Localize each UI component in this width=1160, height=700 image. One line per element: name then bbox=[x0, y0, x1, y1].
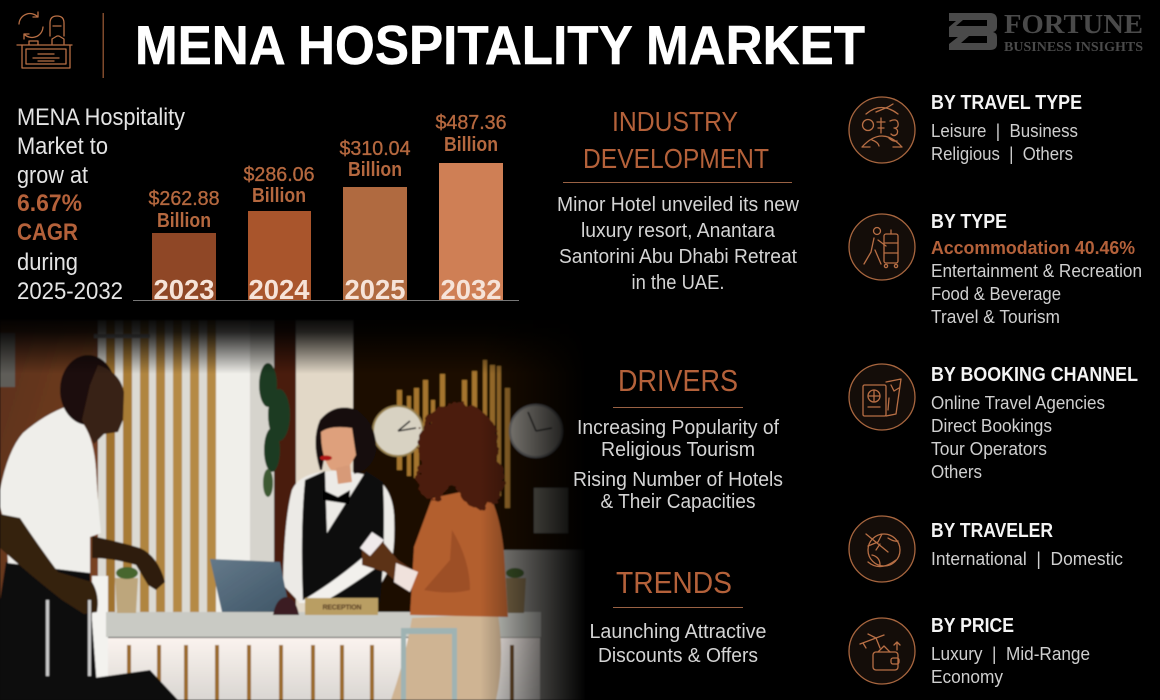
CAGR text block: grow at bbox=[17, 162, 88, 189]
segment: by price: Economy bbox=[931, 667, 1003, 687]
segment: by type: Entertainment & Recreation bbox=[931, 261, 1142, 281]
panel: industry development: luxury resort, Anantara bbox=[581, 220, 776, 242]
logo: Fortune Business Insights: BUSINESS INSIGHTS bbox=[1004, 40, 1143, 55]
segment: by type: Accommodation 40.46% bbox=[931, 238, 1135, 258]
panel: industry development: DEVELOPMENT bbox=[583, 143, 769, 174]
segment: by booking channel: Others bbox=[931, 462, 982, 482]
bar 2032: $487.36 bbox=[436, 112, 506, 134]
segment: by travel type: Religious | Others bbox=[931, 144, 1073, 164]
panel: industry development: INDUSTRY bbox=[612, 106, 738, 137]
bar 2023: Billion bbox=[157, 210, 211, 232]
potted plant bbox=[115, 567, 138, 613]
bar 2023: $262.88 bbox=[148, 188, 220, 210]
bar 2025: $310.04 bbox=[340, 138, 410, 160]
segment: by traveler: BY TRAVELER bbox=[931, 520, 1053, 542]
bar 2025: 2025 bbox=[344, 274, 406, 305]
guest woman bbox=[360, 403, 508, 700]
segment: by booking channel: BY BOOKING CHANNEL bbox=[931, 364, 1138, 386]
segment: by travel type: BY TRAVEL TYPE bbox=[931, 92, 1082, 114]
wall clock bbox=[373, 406, 423, 456]
CAGR text block: 2025-2032 bbox=[17, 278, 123, 305]
bar 2024: 2024 bbox=[248, 274, 310, 305]
foliage bbox=[259, 363, 290, 497]
bar 2025 bbox=[340, 138, 410, 305]
panel: industry development: in the UAE. bbox=[632, 272, 724, 294]
panel: industry development: Minor Hotel unveiled its new bbox=[557, 194, 800, 216]
bar 2024: Billion bbox=[252, 185, 306, 207]
bar 2024: $286.06 bbox=[244, 164, 314, 186]
bar 2023: 2023 bbox=[154, 274, 214, 305]
receptionist bbox=[283, 408, 394, 603]
panel: trends bbox=[590, 565, 766, 667]
header divider bbox=[102, 13, 104, 78]
panel: drivers: Rising Number of Hotels bbox=[573, 469, 783, 491]
logo: Fortune Business Insights bbox=[949, 9, 1143, 55]
bar 2023 bbox=[148, 188, 220, 305]
bar 2032: 2032 bbox=[440, 274, 502, 305]
bar 2025: Billion bbox=[348, 159, 402, 181]
CAGR text block: MENA Hospitality bbox=[17, 104, 185, 131]
CAGR text block: during bbox=[17, 249, 78, 276]
reception sign: RECEPTION bbox=[322, 604, 362, 612]
laptop bbox=[210, 559, 290, 612]
segment: by type: Travel & Tourism bbox=[931, 307, 1060, 327]
segment: by price: Luxury | Mid-Range bbox=[931, 644, 1090, 664]
CAGR text block: Market to bbox=[17, 133, 108, 160]
CAGR text block: CAGR bbox=[17, 219, 78, 246]
CAGR text block: 6.67% bbox=[17, 190, 82, 217]
desk bell bbox=[273, 597, 299, 615]
panel: drivers: & Their Capacities bbox=[600, 491, 756, 513]
panel: trends: TRENDS bbox=[616, 565, 732, 600]
segment: by type: BY TYPE bbox=[931, 211, 1007, 233]
panel: drivers: Religious Tourism bbox=[601, 439, 755, 461]
CAGR text block bbox=[17, 104, 185, 305]
panel: drivers: Increasing Popularity of bbox=[577, 417, 779, 439]
icon: plane circling globe bbox=[849, 516, 915, 582]
photo: hotel reception desk scene bbox=[0, 314, 605, 700]
segment: by type: Food & Beverage bbox=[931, 284, 1061, 304]
second potted plant bbox=[506, 568, 526, 613]
segment: by booking channel: Tour Operators bbox=[931, 439, 1047, 459]
title: MENA HOSPITALITY MARKET bbox=[135, 14, 865, 76]
second wall clock bbox=[510, 405, 562, 457]
panel: industry development bbox=[557, 106, 800, 294]
icon: bellhop with luggage cart bbox=[849, 214, 915, 280]
guest man bbox=[0, 355, 178, 700]
bar 2024 bbox=[244, 164, 314, 305]
segment: by booking channel: Online Travel Agencies bbox=[931, 393, 1105, 413]
segment: by booking channel: Direct Bookings bbox=[931, 416, 1052, 436]
segment: by traveler bbox=[849, 516, 1123, 582]
panel: trends: Launching Attractive bbox=[590, 621, 766, 643]
bar chart: market size bbox=[133, 112, 519, 305]
panel: drivers bbox=[573, 363, 783, 513]
segment: by type bbox=[849, 211, 1142, 327]
segment: by travel type bbox=[849, 92, 1082, 164]
segment: by travel type: Leisure | Business bbox=[931, 121, 1078, 141]
segment: by booking channel bbox=[849, 364, 1138, 482]
bar 2032 bbox=[436, 112, 506, 305]
segment: by price bbox=[849, 615, 1090, 687]
header icon: receptionist at desk bbox=[17, 12, 72, 68]
reception sign bbox=[305, 598, 378, 615]
icon: passport and ticket bbox=[849, 364, 915, 430]
icon: globe with religious symbols bbox=[849, 97, 915, 163]
panel: trends: Discounts & Offers bbox=[598, 645, 758, 667]
segment: by price: BY PRICE bbox=[931, 615, 1014, 637]
segment: by traveler: International | Domestic bbox=[931, 549, 1123, 569]
logo: Fortune Business Insights: FORTUNE bbox=[1004, 9, 1143, 39]
panel: industry development: Santorini Abu Dhabi Retreat bbox=[559, 246, 797, 268]
counter and desk front bbox=[92, 576, 541, 700]
bar 2032: Billion bbox=[444, 134, 498, 156]
panel: drivers: DRIVERS bbox=[618, 363, 738, 398]
icon: plane and wallet bbox=[849, 618, 915, 684]
